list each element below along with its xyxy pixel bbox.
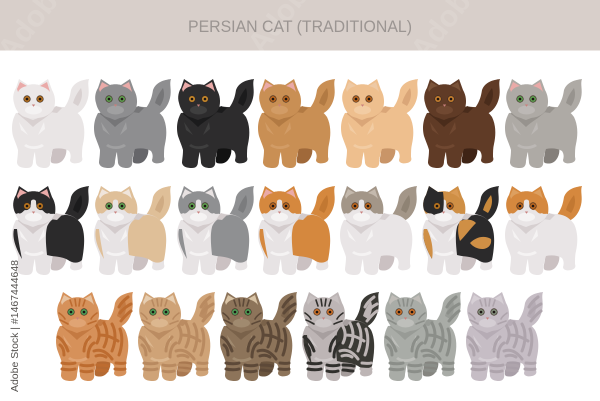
header watermarks [0, 0, 488, 66]
calico patches [423, 186, 491, 259]
cat: chocolate [423, 79, 500, 168]
cat: taupe van [340, 186, 417, 275]
header band [0, 0, 600, 50]
cat: lilac tabby [466, 292, 543, 381]
stock credit: Adobe Stock | #1467444648 [10, 260, 21, 392]
cat: black and white [12, 186, 89, 275]
cat: cinnamon [258, 79, 335, 168]
cat: brown tabby [220, 292, 297, 381]
cat: orange van [505, 186, 582, 275]
cat: grey and white [177, 186, 254, 275]
cat: black [177, 79, 254, 168]
cat: red tabby [56, 292, 133, 381]
cat: silver tabby [384, 292, 461, 381]
cat: cream and white [94, 186, 171, 275]
cat: cream tabby [138, 292, 215, 381]
cat: black silver tabby [302, 292, 379, 381]
cat: lilac grey [505, 79, 582, 168]
cat: orange and white [258, 186, 335, 275]
cat: cream [341, 79, 418, 168]
title: PERSIAN CAT (TRADITIONAL) [188, 18, 412, 36]
cat: calico [422, 186, 499, 275]
cat: white [12, 79, 89, 168]
cat: blue grey [94, 79, 171, 168]
